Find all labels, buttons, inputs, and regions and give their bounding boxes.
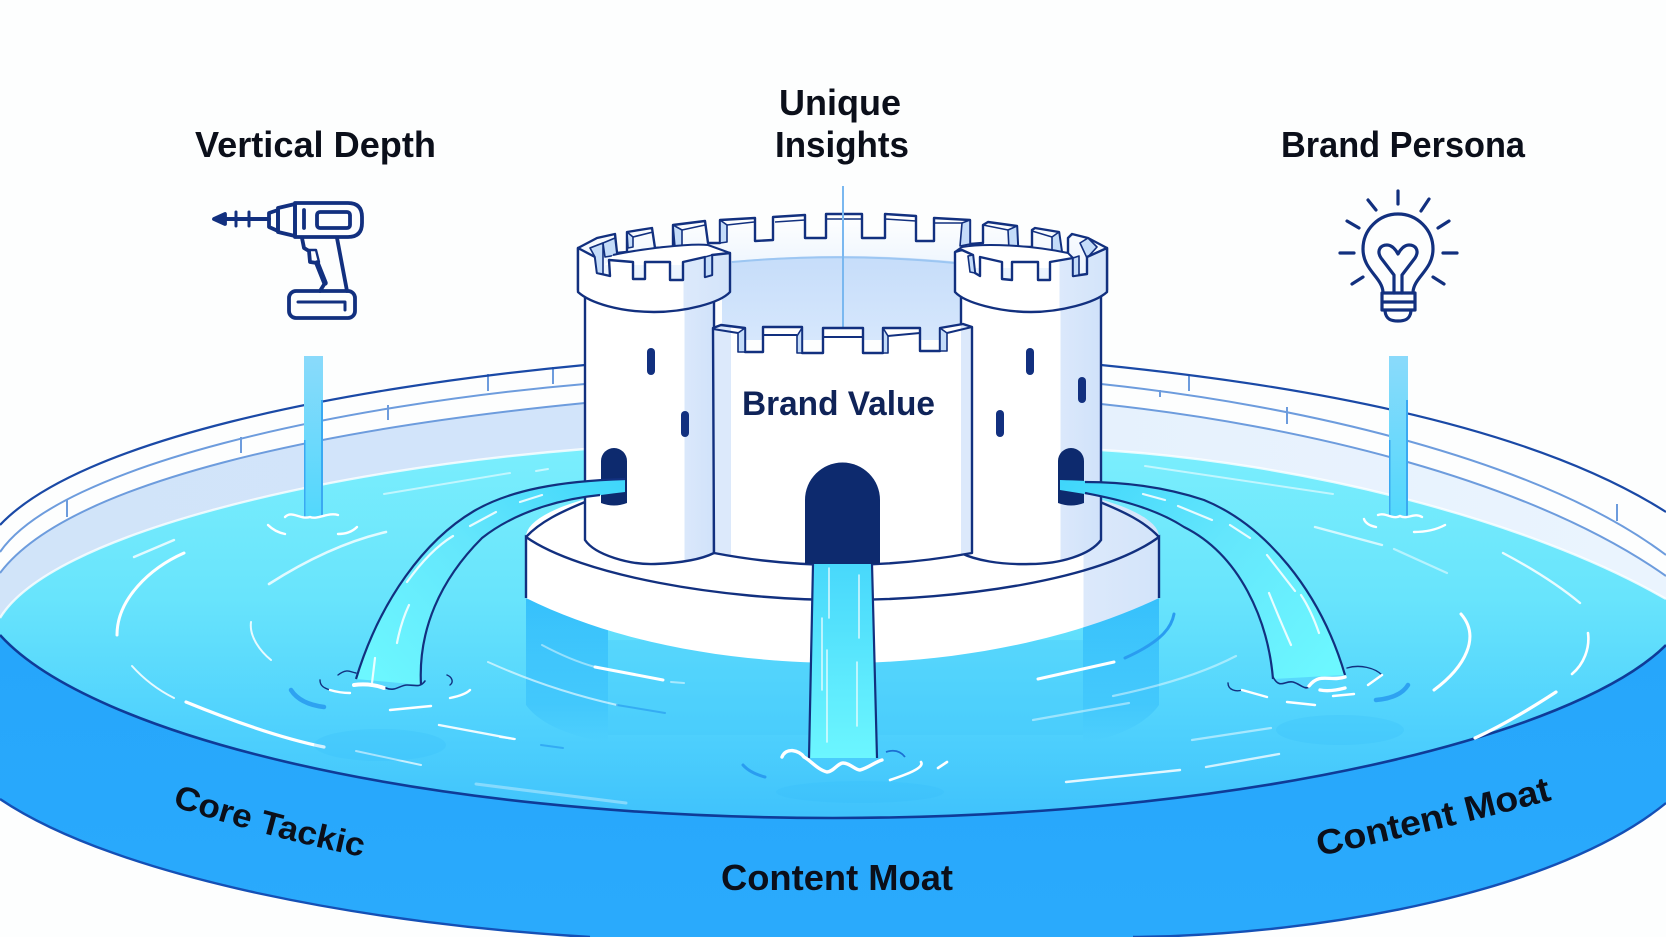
water shadows (314, 715, 1404, 803)
left tower outlet (601, 448, 627, 506)
waterfall: left outlet (320, 479, 625, 710)
label: Brand Value: Brand Value (742, 385, 935, 423)
thin stream: Brand Persona (1364, 356, 1445, 532)
left tower (578, 243, 730, 564)
central sight line (842, 186, 844, 327)
gate (805, 463, 880, 564)
central keep (713, 324, 972, 565)
moat outer wall bottom edge (0, 799, 1666, 937)
label: Vertical Depth: Vertical Depth (195, 124, 436, 165)
label: Content Moat (right): Content Moat (1318, 778, 1552, 854)
moat outer wall (0, 635, 1666, 937)
moat retaining wall (0, 365, 1666, 640)
arrow slits (996, 348, 1086, 437)
label: Unique Insights: Unique (779, 82, 901, 123)
castle (526, 186, 1159, 663)
label: Content Moat (front): Content Moat (721, 857, 953, 898)
right tower (955, 245, 1107, 564)
merlon side faces (603, 220, 1097, 258)
back rampart (578, 186, 1107, 340)
keep merlon faces (738, 328, 947, 353)
moat water surface (0, 449, 1666, 818)
arrow slits (647, 348, 689, 437)
moat front rim line (0, 635, 1666, 818)
left splash (320, 671, 470, 710)
curve for Core Tackic (172, 806, 368, 858)
water ripples (117, 466, 1588, 803)
waterfall: central gate (782, 564, 947, 780)
right tower outlet (1058, 448, 1084, 506)
waterfall: right outlet (1060, 480, 1382, 705)
ripple accents (291, 614, 1408, 777)
icon: light bulb with heart (1340, 191, 1457, 321)
icon: power drill (214, 203, 362, 318)
thin stream: Vertical Depth (268, 356, 357, 534)
castle base platform (526, 472, 1159, 663)
label: Core Tackic: Core Tackic (176, 787, 364, 856)
merlon top faces (590, 219, 1052, 248)
right splash (1228, 666, 1382, 705)
label: Unique Insights (775, 82, 909, 165)
label: Unique Insights: Insights (775, 124, 909, 165)
curve for Content Moat (1319, 799, 1555, 856)
water back edge highlight (0, 449, 1666, 618)
label: Brand Persona: Brand Persona (1281, 124, 1526, 165)
castle base reflection (526, 590, 1159, 742)
